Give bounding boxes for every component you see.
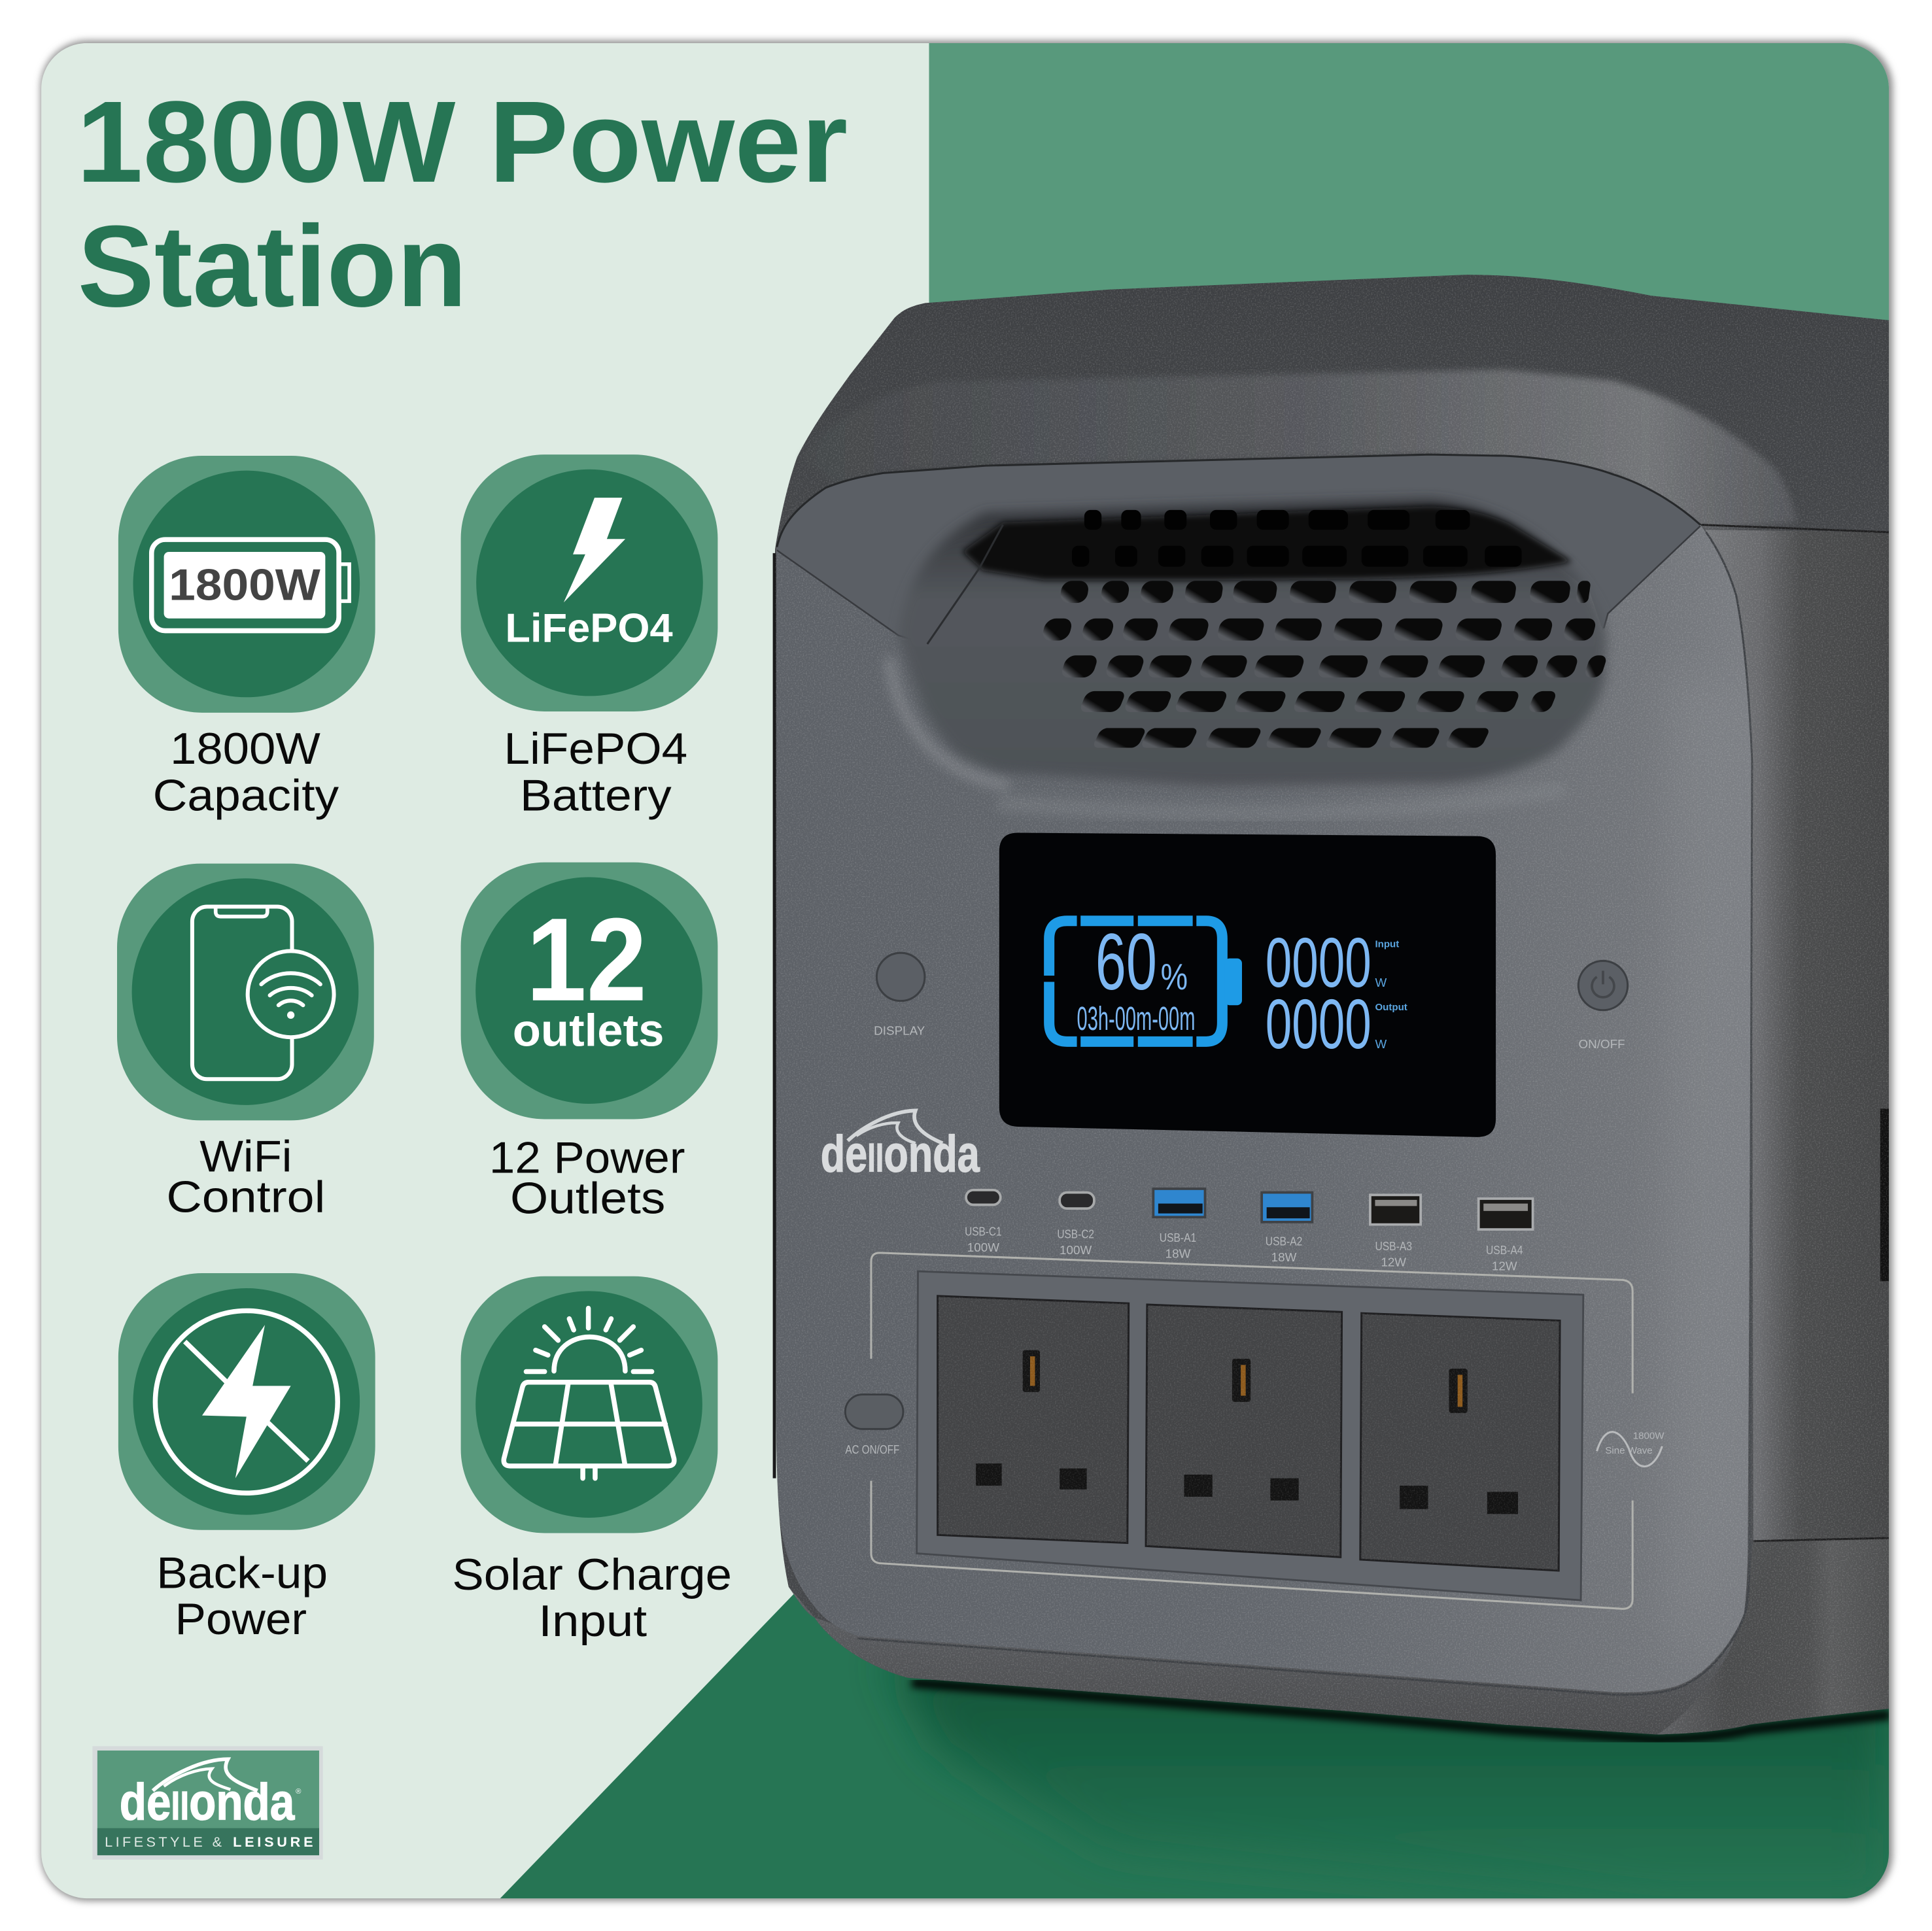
power glyph — [1592, 971, 1614, 997]
disc — [475, 877, 702, 1104]
port labels: 100W — [1060, 1243, 1092, 1257]
remaining time: 03h-00m-00m — [1077, 1000, 1195, 1037]
shell shoulder highlight — [801, 369, 1797, 530]
handle band — [777, 454, 1700, 644]
USB-C ports — [966, 1190, 1094, 1208]
icon: bolt — [564, 498, 625, 602]
sine wave icon — [1597, 1432, 1662, 1467]
mid green panel — [929, 43, 1889, 320]
port labels — [965, 1225, 1523, 1273]
front face — [776, 454, 1752, 1692]
socket 1 shutter — [1030, 1356, 1035, 1386]
port labels: 12W — [1381, 1256, 1406, 1269]
icon: sun — [526, 1308, 652, 1372]
feature: 12 outlets — [461, 863, 717, 1223]
socket 3 shutter — [1458, 1375, 1462, 1407]
socket 3 live — [1400, 1486, 1428, 1509]
product shell — [775, 275, 1889, 1735]
front right seam — [857, 532, 1752, 1695]
icon: ring — [155, 1310, 337, 1493]
logo border — [92, 1746, 323, 1860]
USB ports — [965, 1189, 1533, 1273]
icon word: outlets — [513, 1004, 664, 1055]
vent hidden rows — [1072, 510, 1522, 567]
input label: Input — [1375, 939, 1399, 950]
tile — [461, 454, 717, 711]
label line 2: Input — [538, 1597, 647, 1646]
contact shadow — [912, 1683, 1890, 1739]
port labels: USB-A2 — [1266, 1235, 1302, 1248]
logo word: dellonda — [120, 1773, 295, 1831]
USB-A blue inner — [1158, 1204, 1310, 1218]
feature: solar charge input — [452, 1276, 732, 1646]
title line 2: Station — [78, 201, 467, 331]
label: WiFi — [199, 1133, 292, 1182]
disc — [133, 471, 360, 697]
socket 1 face — [938, 1296, 1129, 1543]
socket plate — [917, 1271, 1583, 1600]
sine wave wattage: 1800W — [1633, 1430, 1665, 1441]
port labels: USB-A3 — [1375, 1239, 1412, 1253]
icon: wifi arcs — [261, 973, 320, 1005]
socket 2 earth — [1232, 1359, 1251, 1402]
brand logo — [92, 1746, 323, 1860]
AC outlet panel — [845, 1253, 1665, 1609]
screen panel — [999, 833, 1496, 1137]
AC switch label: AC ON/OFF — [845, 1443, 899, 1456]
face highlight under recess — [998, 789, 1565, 813]
power ring — [1578, 961, 1628, 1010]
button ring — [876, 953, 925, 1001]
logo registered mark: ® — [296, 1788, 302, 1796]
socket 1 earth — [1023, 1350, 1040, 1392]
socket 3 neutral — [1487, 1492, 1518, 1514]
socket 2 neutral — [1270, 1478, 1299, 1501]
feature: 1800W capacity — [118, 456, 375, 821]
title — [77, 77, 848, 331]
output watts: 0000 — [1266, 985, 1371, 1063]
icon number: 12 — [526, 894, 647, 1026]
socket 1 — [938, 1296, 1129, 1543]
port labels: USB-C1 — [965, 1225, 1002, 1239]
socket 3 earth — [1449, 1369, 1468, 1413]
battery cap — [340, 564, 349, 601]
socket 1 neutral — [1060, 1469, 1087, 1490]
handle inner line — [927, 525, 1003, 644]
icon text: LiFePO4 — [505, 606, 673, 651]
disc — [133, 1288, 360, 1515]
logo field — [97, 1751, 319, 1855]
port labels: USB-A4 — [1486, 1243, 1523, 1257]
disc — [475, 1291, 702, 1518]
side lower panel — [1657, 1538, 1889, 1735]
label: Back-up — [156, 1548, 328, 1598]
USB-A black inner — [1375, 1200, 1528, 1211]
battery tab — [1225, 959, 1242, 1005]
handle dark cavity — [962, 506, 1572, 580]
sine wave label: Sine Wave — [1605, 1445, 1653, 1456]
port labels: USB-C2 — [1057, 1227, 1094, 1240]
disc — [476, 470, 703, 696]
label: Solar Charge — [452, 1550, 732, 1599]
label: 1800W — [170, 725, 320, 774]
LCD screen — [999, 833, 1496, 1137]
feature: back-up power — [118, 1273, 375, 1644]
port labels: 100W — [967, 1240, 999, 1254]
logo wave — [848, 1110, 942, 1143]
port labels: 18W — [1165, 1246, 1191, 1260]
feature: LiFePO4 battery — [461, 454, 717, 821]
USB-A black ports — [1370, 1195, 1533, 1229]
socket 3 — [1360, 1313, 1560, 1571]
tile — [461, 863, 717, 1119]
label line 2: Power — [175, 1595, 307, 1644]
recess left highlight — [889, 658, 1009, 785]
front left edge — [774, 553, 775, 1478]
floor shadow — [887, 1657, 1890, 1900]
label line 2: Capacity — [153, 772, 339, 821]
icon: wifi dot — [287, 1012, 294, 1019]
logo strap band — [97, 1828, 319, 1855]
USB-A blue ports — [1153, 1189, 1312, 1222]
face highlight right — [1663, 665, 1747, 1650]
input unit: W — [1375, 976, 1387, 989]
percent sign: % — [1161, 956, 1188, 997]
disc — [132, 878, 358, 1105]
side slot — [1880, 1109, 1890, 1281]
vent holes — [1041, 510, 1608, 748]
icon: slash — [185, 1342, 308, 1461]
socket grain — [938, 1293, 1561, 1572]
tile — [118, 456, 375, 713]
icon: phone — [192, 907, 292, 1079]
port labels: 12W — [1492, 1259, 1517, 1273]
label: LiFePO4 — [504, 725, 687, 774]
icon: bolt — [202, 1325, 291, 1478]
feature: WiFi control — [117, 864, 374, 1222]
battery percent: 60 — [1095, 917, 1157, 1006]
icon: solar panel — [504, 1308, 674, 1478]
band seams — [777, 526, 1700, 644]
AC switch — [845, 1395, 903, 1429]
port labels: USB-A1 — [1160, 1231, 1196, 1244]
grain over shell and face — [775, 275, 1890, 1741]
outline — [871, 1253, 1632, 1609]
socket 2 — [1146, 1305, 1342, 1557]
socket 2 shutter — [1241, 1365, 1246, 1395]
output unit: W — [1375, 1037, 1387, 1051]
title line 1: 1800W Power — [77, 77, 848, 207]
button label: DISPLAY — [874, 1023, 925, 1037]
handle recess — [898, 499, 1607, 786]
port labels: 18W — [1271, 1250, 1297, 1264]
upper seam — [777, 454, 1700, 547]
power button — [1578, 961, 1628, 1051]
socket 3 face — [1360, 1313, 1560, 1571]
socket 1 live — [976, 1463, 1002, 1486]
tile — [117, 864, 374, 1120]
logo strap: LIFESTYLE & — [105, 1834, 222, 1850]
icon: phone notch — [216, 908, 267, 917]
logo wave — [153, 1759, 258, 1790]
bottom lip — [789, 1586, 1750, 1735]
dark green floor — [499, 1140, 1890, 1900]
socket 2 face — [1146, 1305, 1342, 1557]
tile — [118, 1273, 375, 1530]
battery fill — [164, 552, 325, 619]
power label: ON/OFF — [1579, 1037, 1625, 1051]
logo strap bold: LEISURE — [233, 1834, 313, 1850]
label line 2: Battery — [520, 772, 672, 821]
device logo — [821, 1110, 980, 1183]
logo word: dellonda — [821, 1125, 980, 1183]
label line 2: Outlets — [510, 1174, 665, 1223]
battery gauge — [1049, 921, 1222, 1042]
output label: Output — [1375, 1002, 1407, 1013]
battery text: 1800W — [169, 560, 320, 609]
side seam — [1700, 525, 1889, 1541]
socket 2 live — [1184, 1475, 1213, 1497]
label: 12 Power — [489, 1133, 685, 1182]
icon: wifi badge — [248, 951, 334, 1037]
product: power station — [774, 275, 1890, 1741]
icon: battery — [152, 539, 349, 631]
label line 2: Control — [166, 1173, 325, 1222]
tile — [461, 1276, 717, 1533]
input watts: 0000 — [1266, 923, 1371, 1002]
display button — [874, 953, 925, 1037]
side panel — [1705, 530, 1889, 1541]
battery outline — [152, 539, 339, 631]
